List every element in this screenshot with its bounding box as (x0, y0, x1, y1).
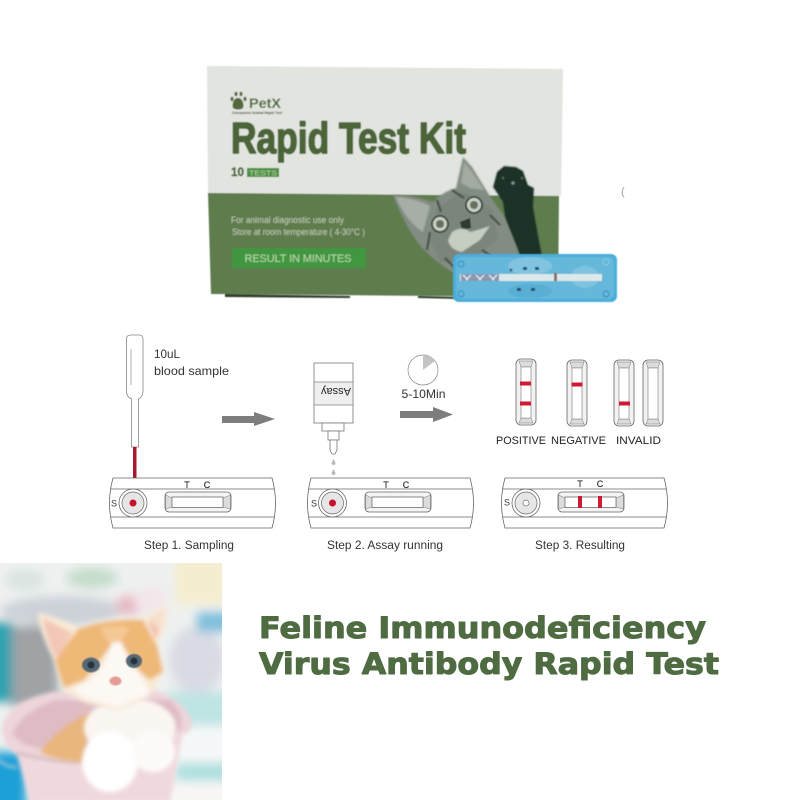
test strip (460, 273, 602, 281)
test cassette in blister (453, 254, 617, 302)
photo: kitten in pink bucket (0, 555, 236, 800)
assay buffer bottle (314, 362, 354, 475)
sample volume label (154, 347, 229, 378)
result in minutes button (232, 248, 366, 268)
device step 2 (308, 478, 474, 528)
result labels: POSITIVE (496, 435, 546, 447)
device step 3: S (504, 498, 510, 508)
result: invalid 2 (643, 360, 663, 426)
device step 2: S (311, 498, 317, 508)
kitten (38, 605, 176, 792)
box usage text: Store at room temperature ( 4-30°C ) (232, 227, 365, 237)
white chest (81, 698, 178, 744)
device step 1: C (204, 480, 211, 490)
heading (259, 611, 719, 681)
result: invalid 1 (614, 360, 634, 426)
timer icon (408, 355, 438, 385)
box usage text (231, 215, 365, 237)
result labels (496, 435, 661, 447)
logo: PetX (230, 92, 283, 115)
box title: Rapid Test Kit (231, 114, 466, 163)
result: negative (567, 360, 587, 426)
arrow 1 (222, 412, 275, 426)
box upper panel (207, 66, 563, 196)
assay buffer bottle: Assay E (308, 385, 351, 397)
heading: Feline Immunodeficiency (259, 611, 706, 645)
blood column (133, 447, 136, 484)
box usage text: For animal diagnostic use only (231, 215, 344, 225)
result labels: NEGATIVE (551, 435, 606, 447)
sample volume label: 10uL (154, 347, 180, 361)
eyes and nose (82, 658, 100, 672)
box cat illustration (393, 157, 543, 272)
heading: Virus Antibody Rapid Test (259, 647, 719, 681)
logo: PetX: Companion Animal Rapid Test (232, 110, 283, 115)
bucket (0, 688, 192, 800)
timer label: 5-10Min (402, 387, 446, 401)
result labels: INVALID (616, 435, 661, 447)
result: positive (516, 359, 536, 425)
10 tests badge: TESTS (249, 170, 277, 178)
device step 3: T (577, 479, 583, 489)
10 tests badge (231, 165, 279, 179)
paws (82, 732, 175, 792)
device step 3 label: Step 3. Resulting (535, 540, 625, 552)
result in minutes button: RESULT IN MINUTES (244, 253, 352, 265)
device step 1 label: Step 1. Sampling (144, 540, 234, 552)
device step 2 label: Step 2. Assay running (327, 540, 443, 552)
device step 1 (110, 478, 276, 528)
arrow 2 (400, 407, 453, 422)
device step 2: T (383, 480, 389, 490)
box lower green band (208, 193, 559, 297)
device step 3: C (597, 479, 604, 489)
head (38, 605, 168, 710)
device step 3 (502, 478, 668, 528)
step 1 pipette (126, 335, 143, 484)
drops (332, 459, 336, 475)
orange body (40, 712, 92, 762)
device step 2: C (403, 480, 410, 490)
device step 1: S (111, 498, 117, 508)
10 tests badge: 10 (231, 165, 244, 179)
device step 1: T (184, 480, 190, 490)
stray mark: ( (621, 186, 625, 198)
logo: PetX: PetX (249, 96, 281, 111)
product box (207, 66, 563, 299)
box bottom shadow (225, 294, 460, 299)
sample volume label: blood sample (154, 364, 229, 378)
